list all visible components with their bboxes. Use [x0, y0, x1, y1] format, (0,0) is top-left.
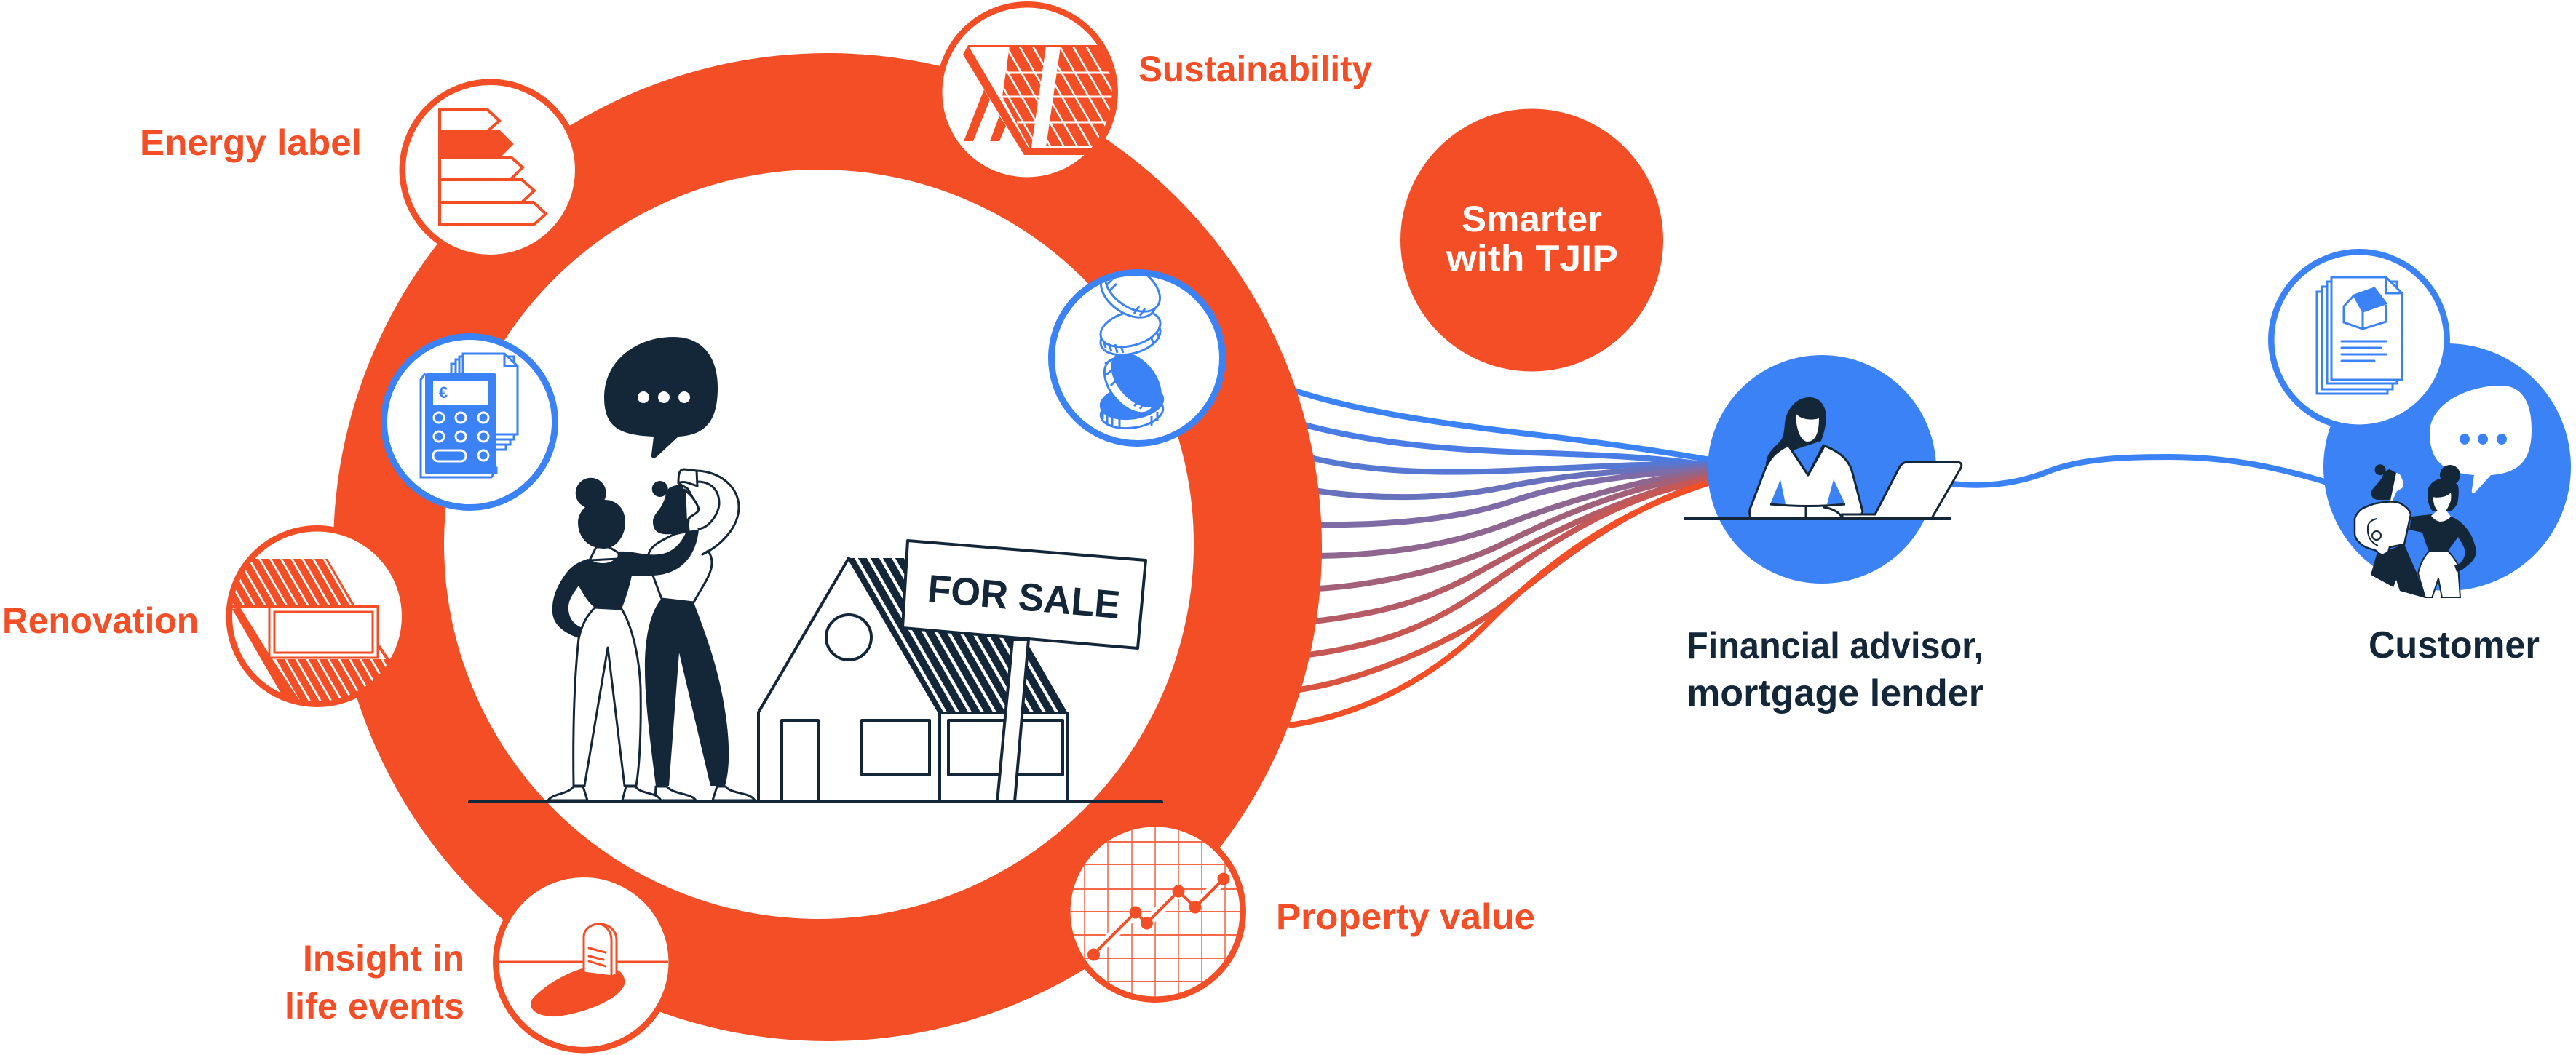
label: insight in life events	[285, 938, 464, 1027]
panel: financial advisor	[1684, 355, 1962, 584]
label: financial advisor, mortgage lender: mortgage lender	[1687, 672, 1983, 714]
icon: energy label	[403, 82, 578, 258]
badge: smarter with TJIP	[1400, 109, 1663, 371]
customer right face	[2433, 493, 2451, 512]
figure: woman on left	[548, 478, 699, 800]
icon: solar panel	[939, 4, 1121, 180]
label: insight in life events: life events	[285, 986, 464, 1027]
icon: white speech bubble	[2430, 386, 2532, 493]
label: customer: Customer	[2369, 624, 2540, 666]
desk line	[1684, 517, 1951, 520]
customer right hair	[2428, 479, 2459, 511]
panel: orange ring	[333, 53, 1322, 1041]
icon: documents with house	[2271, 252, 2447, 428]
illustration: couple and house for sale	[469, 337, 1162, 802]
label: sustainability: Sustainability	[1138, 49, 1372, 89]
flow lines from ring to advisor	[1288, 389, 1711, 725]
panel: customer	[2323, 343, 2571, 598]
customer right top	[2409, 514, 2476, 572]
badge: smarter with TJIP: with TJIP	[1446, 238, 1618, 279]
calculator	[421, 373, 496, 477]
coin: top tilted	[1100, 276, 1161, 319]
label: financial advisor, mortgage lender	[1687, 625, 1983, 714]
customer left torso and arm	[2355, 501, 2411, 555]
coin: third tilted filled	[1103, 354, 1162, 412]
icon: speech bubble with dots	[604, 337, 718, 458]
laptop	[1842, 462, 1962, 518]
coin: second flat	[1099, 313, 1162, 356]
label: insight in life events: Insight in	[303, 938, 464, 979]
calculator: €	[439, 383, 448, 402]
customer right collar	[2431, 511, 2451, 522]
sign: for sale: FOR SALE	[926, 567, 1122, 627]
icon: grave stone	[496, 875, 672, 1050]
figures: two customers	[2355, 464, 2476, 598]
label: property value: Property value	[1276, 896, 1535, 937]
documents stack	[451, 354, 518, 450]
sign: for sale	[903, 541, 1146, 802]
connector line from advisor to customer	[1936, 457, 2329, 485]
customer left hair	[2371, 469, 2396, 500]
icon: calculator and documents	[384, 336, 555, 508]
figure: woman on right	[645, 469, 755, 800]
house	[758, 558, 1068, 802]
label: renovation: Renovation	[2, 600, 199, 641]
label: financial advisor, mortgage lender: Financial advisor,	[1687, 625, 1983, 667]
icon: property value chart	[1070, 827, 1246, 1003]
coin: bottom flat filled	[1099, 391, 1165, 429]
customer left face	[2390, 473, 2403, 501]
customer left pants	[2371, 544, 2425, 598]
customer right pants	[2418, 551, 2460, 598]
ground line	[469, 800, 1162, 803]
figure: advisor	[1750, 397, 1863, 519]
label: energy label: Energy label	[140, 122, 362, 163]
icon: renovation roof	[226, 528, 405, 720]
badge: smarter with TJIP: Smarter	[1462, 199, 1602, 239]
icon: coins	[1051, 255, 1223, 444]
